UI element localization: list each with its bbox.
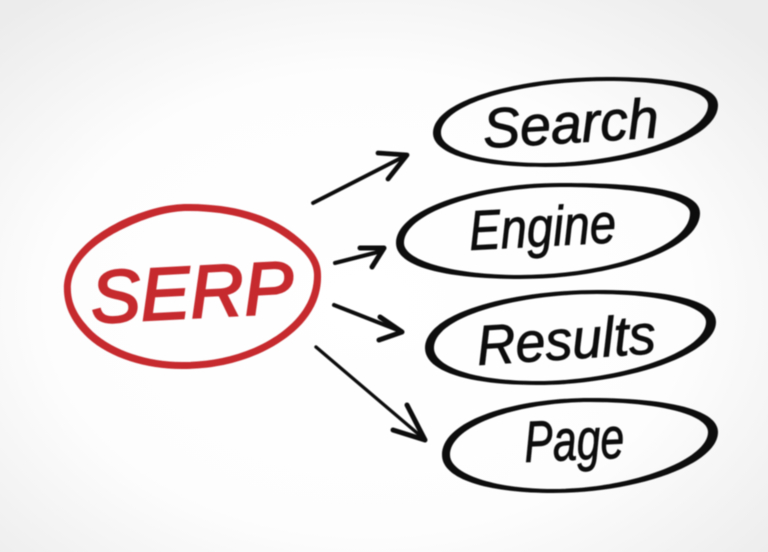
arrow to Engine: [335, 248, 384, 267]
red hand-drawn ellipse: [64, 204, 321, 369]
Engine label: Engine: [467, 191, 617, 262]
Page hand-drawn ellipse: [442, 398, 718, 493]
arrow to Search: [313, 153, 407, 203]
arrow to Page: [316, 347, 425, 440]
Engine hand-drawn ellipse: [396, 183, 700, 279]
Results hand-drawn ellipse: [425, 290, 716, 385]
Search pill: [433, 77, 718, 167]
red circled SERP: [64, 204, 321, 369]
diagram artwork: [64, 77, 718, 493]
Results label: Results: [475, 302, 657, 377]
Engine pill: [396, 183, 700, 279]
Search hand-drawn ellipse: [433, 77, 718, 167]
Search label: Search: [481, 86, 660, 160]
Page pill: [442, 398, 718, 493]
arrow to Results: [334, 305, 402, 340]
SERP label: SERP: [88, 245, 296, 339]
Page label: Page: [523, 406, 625, 475]
Results pill: [425, 290, 716, 385]
